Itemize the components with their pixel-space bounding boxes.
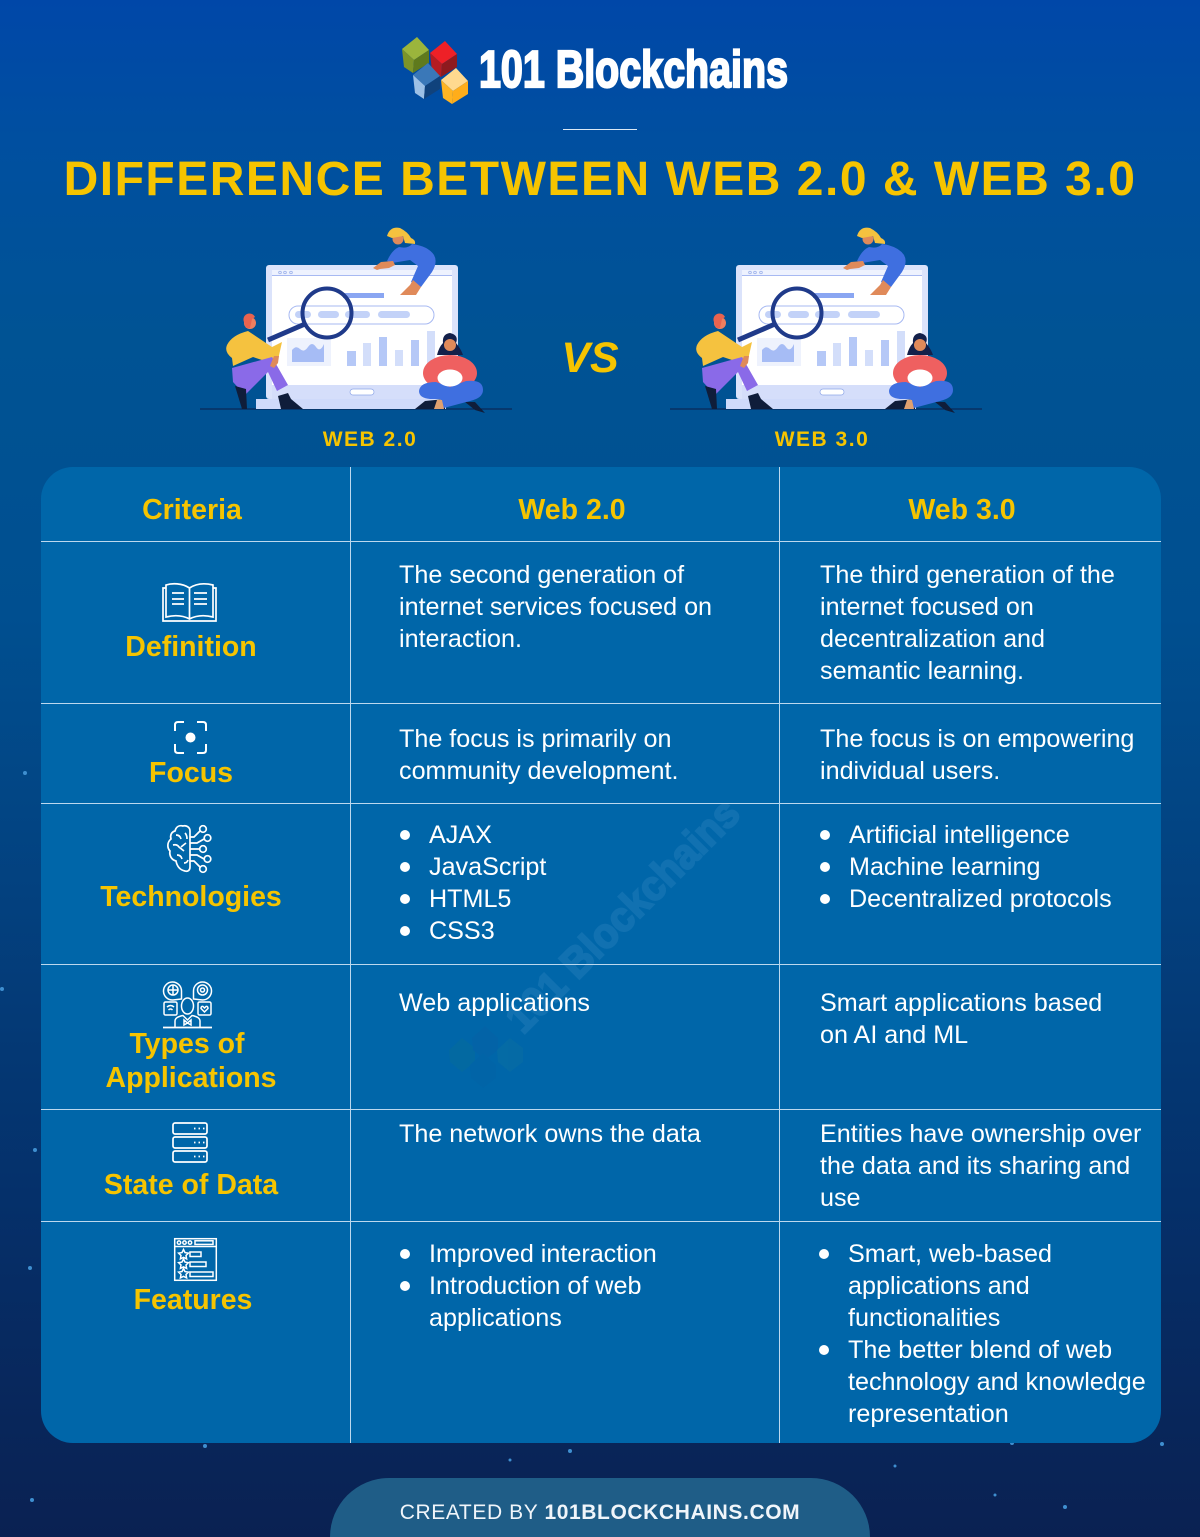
label: focus: Focus: [149, 757, 233, 789]
list: web 2.0 technologies: CSS3: [429, 917, 495, 945]
list: web 3.0 features: functionalities: [848, 1304, 1000, 1332]
column heading: web 2.0: Web 2.0: [518, 494, 626, 526]
row: definition: [125, 561, 1115, 685]
list: web 2.0 technologies: HTML5: [429, 885, 511, 913]
text: web 3.0 data: use: [820, 1184, 861, 1212]
label: types of applications: Types of: [129, 1028, 245, 1060]
logo: [402, 37, 788, 104]
text: web 3.0 applications: on AI and ML: [820, 1021, 968, 1049]
list: web 2.0 technologies: [400, 821, 546, 945]
icon: focus target: [174, 721, 207, 754]
icon: blue cube: [413, 63, 440, 99]
title: DIFFERENCE BETWEEN WEB 2.0 & WEB 3.0: [64, 153, 1136, 206]
text: web 3.0 definition: decentralization and: [820, 625, 1045, 653]
text: web 3.0 definition: [820, 561, 1115, 685]
text: web 3.0 applications: [820, 989, 1102, 1049]
icon: person with applications: [162, 981, 212, 1028]
row: technologies: [100, 821, 1112, 945]
illustration: web 2.0: [200, 228, 512, 413]
list: web 3.0 technologies: Decentralized protocols: [849, 885, 1112, 913]
text: web 3.0 definition: internet focused on: [820, 593, 1034, 621]
list: web 2.0 technologies: AJAX: [429, 821, 492, 849]
list: web 2.0 features: [400, 1240, 657, 1332]
text: web 3.0 definition: The third generation of the: [820, 561, 1115, 589]
header row: [142, 494, 1016, 526]
text: web 2.0 definition: [399, 561, 712, 653]
row: types of applications: [105, 981, 1102, 1094]
footer pill: [330, 1478, 870, 1537]
text: web 3.0 focus: The focus is on empowering: [820, 725, 1134, 753]
list: web 3.0 technologies: Machine learning: [849, 853, 1040, 881]
comparison table: [41, 467, 1161, 1443]
text: web 2.0 data: The network owns the data: [399, 1120, 701, 1148]
list: web 3.0 features: The better blend of web: [848, 1336, 1112, 1364]
watermark: 101 Blockchains: [496, 789, 749, 1042]
text: web 3.0 focus: [820, 725, 1134, 785]
text: web 2.0 focus: [399, 725, 678, 785]
text: web 2.0 definition: internet services focused on: [399, 593, 712, 621]
list: web 2.0 features: applications: [429, 1304, 562, 1332]
text: web 3.0 definition: semantic learning.: [820, 657, 1024, 685]
row: features: [134, 1238, 1146, 1428]
text: web 3.0 data: Entities have ownership over: [820, 1120, 1141, 1148]
text: web 3.0 data: the data and its sharing and: [820, 1152, 1130, 1180]
icon: rated list window: [174, 1238, 218, 1282]
list: web 3.0 technologies: [820, 821, 1112, 913]
list: web 2.0 technologies: JavaScript: [429, 853, 546, 881]
text: web 3.0 data: [820, 1120, 1141, 1212]
list: web 3.0 features: technology and knowledge: [848, 1368, 1146, 1396]
text: web 2.0 definition: The second generation of: [399, 561, 684, 589]
list: web 3.0 features: applications and: [848, 1272, 1030, 1300]
label: technologies: Technologies: [100, 881, 282, 913]
heading: versus: VS: [561, 334, 619, 382]
icon: red cube: [430, 41, 457, 77]
column heading: web 3.0: Web 3.0: [908, 494, 1016, 526]
icon: open book: [162, 582, 217, 622]
label: state of data: State of Data: [104, 1169, 278, 1201]
list: web 3.0 features: Smart, web-based: [848, 1240, 1052, 1268]
label: web 3.0: WEB 3.0: [775, 428, 869, 451]
list: web 3.0 features: representation: [848, 1400, 1009, 1428]
list: web 2.0 features: Introduction of web: [429, 1272, 641, 1300]
footer pill: CREATED BY 101BLOCKCHAINS.COM: [400, 1501, 800, 1524]
text: web 2.0 focus: community development.: [399, 757, 678, 785]
icon: server stack: [172, 1122, 208, 1163]
logo wordmark: 101 Blockchains: [479, 41, 788, 99]
label: features: Features: [134, 1284, 252, 1316]
list: web 2.0 features: Improved interaction: [429, 1240, 657, 1268]
text: web 2.0 focus: The focus is primarily on: [399, 725, 671, 753]
text: web 2.0 definition: interaction.: [399, 625, 522, 653]
text: web 2.0 applications: Web applications: [399, 989, 590, 1017]
label: types of applications: [105, 1028, 276, 1094]
text: web 3.0 focus: individual users.: [820, 757, 1000, 785]
label: types of applications: Applications: [105, 1062, 276, 1094]
icon: brain circuit: [167, 824, 212, 874]
row: state of data: [104, 1120, 1141, 1212]
text: web 3.0 applications: Smart applications based: [820, 989, 1102, 1017]
icon: orange cube: [441, 68, 468, 104]
illustration: web 3.0: [670, 228, 982, 413]
label: web 2.0: WEB 2.0: [323, 428, 417, 451]
list: web 3.0 features: [819, 1240, 1146, 1428]
row: focus: [149, 721, 1134, 789]
column heading: criteria: Criteria: [142, 494, 242, 526]
label: definition: Definition: [125, 631, 257, 663]
list: web 3.0 technologies: Artificial intelligence: [849, 821, 1070, 849]
icon: green cube: [402, 37, 429, 73]
